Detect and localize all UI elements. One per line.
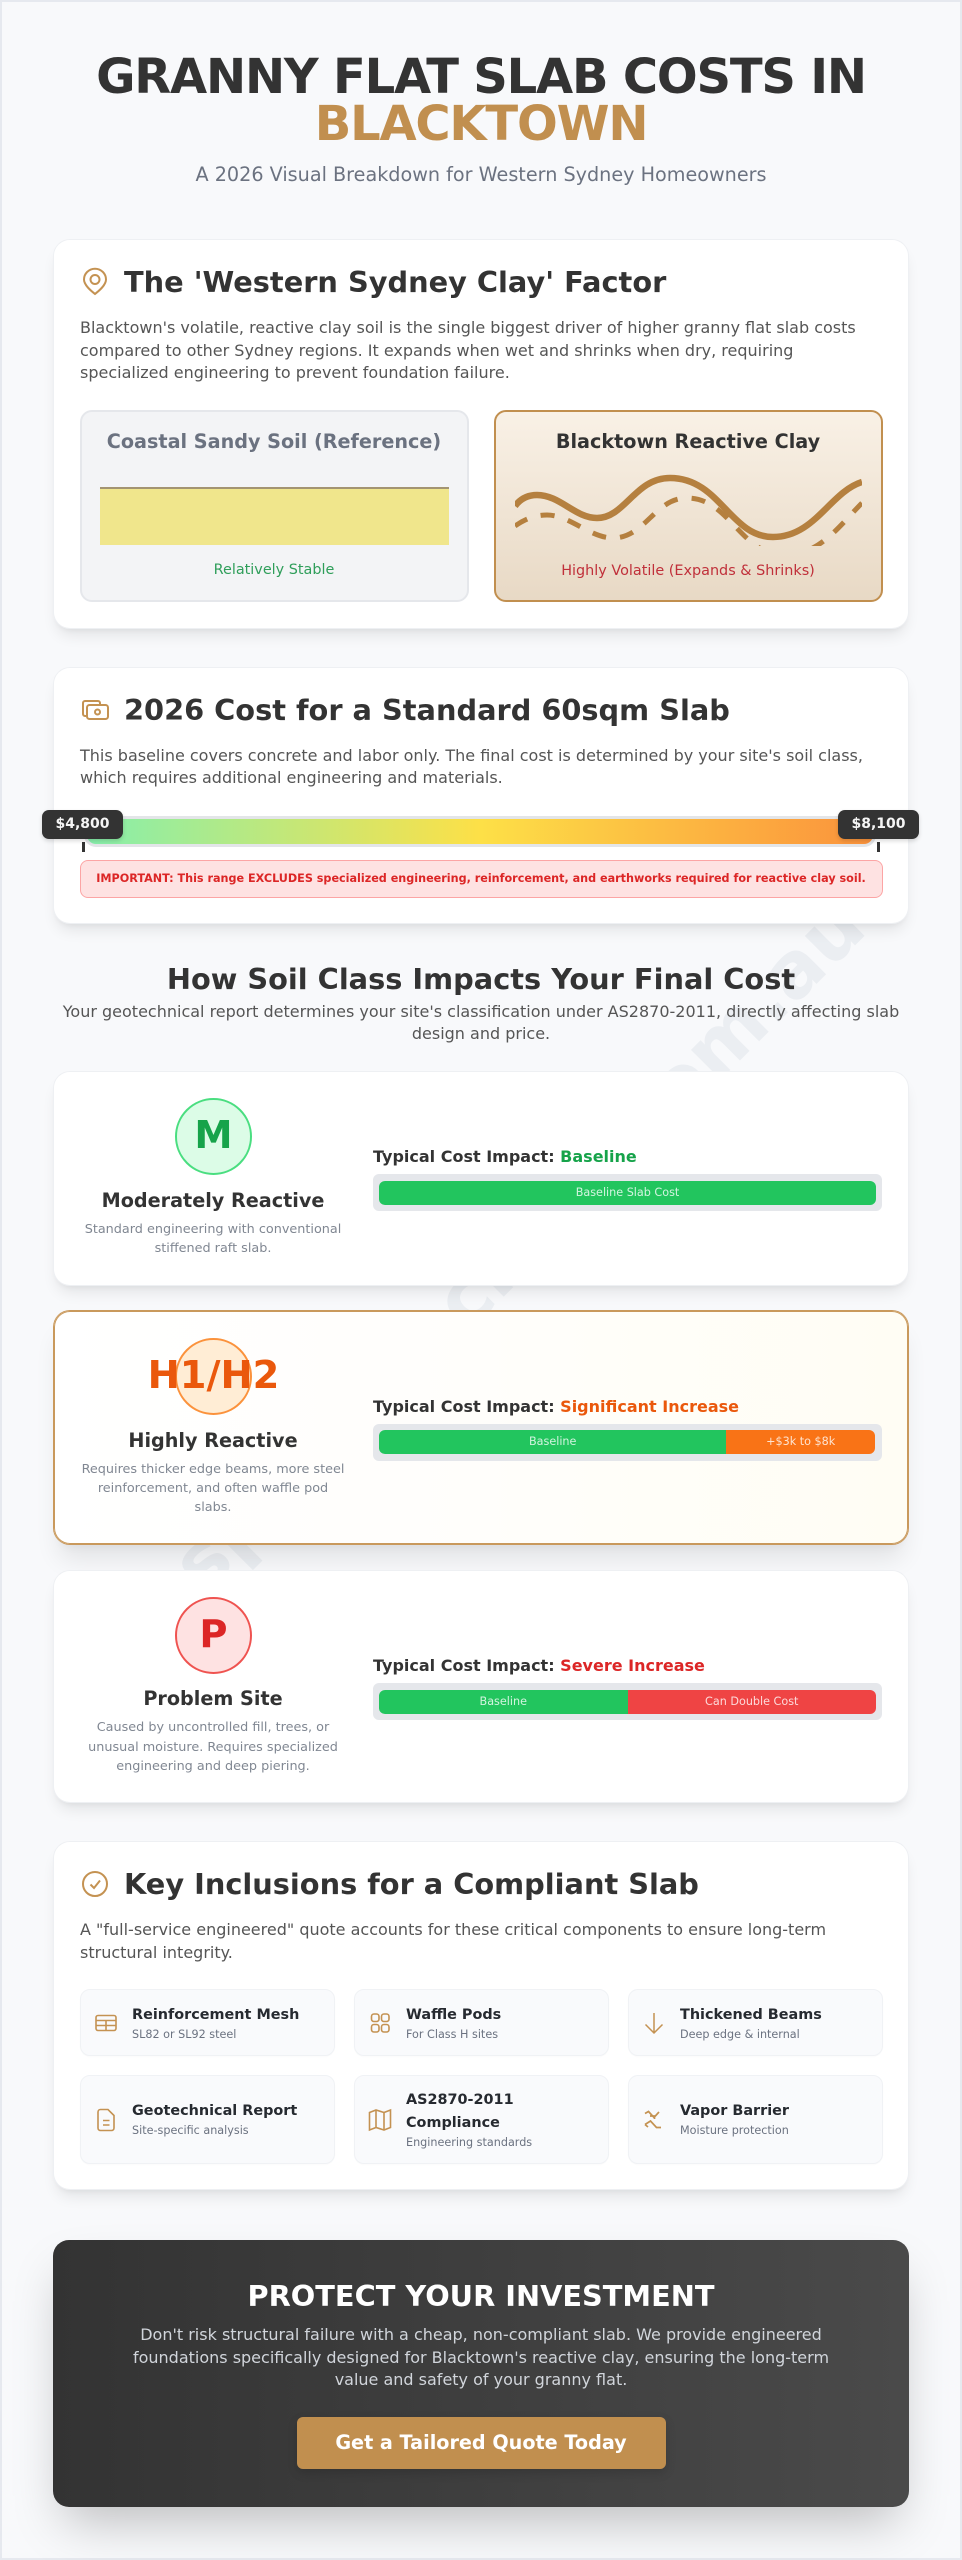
heading: Key Inclusions for a Compliant Slab — [124, 1867, 699, 1901]
cost bar — [373, 1174, 882, 1211]
icon: map pin — [83, 268, 107, 296]
cost label: Typical Cost Impact: Significant Increase — [373, 1396, 739, 1416]
cost bar: Baseline Slab Cost — [576, 1186, 679, 1198]
class description — [85, 1222, 341, 1256]
body text: value and safety of your granny flat. — [335, 2370, 627, 2389]
item: AS2870 compliance: Engineering standards — [406, 2136, 532, 2149]
stability label: Relatively Stable — [214, 562, 334, 578]
intro text: which requires additional engineering and materials. — [80, 768, 503, 787]
panel: 2026 cost — [54, 668, 908, 923]
intro text: specialized engineering to prevent foundation failure. — [80, 363, 510, 382]
tick: low — [82, 842, 84, 852]
badge: P: P — [199, 1612, 228, 1657]
icon: open map — [368, 2108, 392, 2132]
class description: Caused by uncontrolled fill, trees, or — [97, 1720, 329, 1735]
button: Get a Tailored Quote Today — [335, 2431, 627, 2454]
title — [96, 48, 866, 152]
class name: Problem Site — [143, 1687, 283, 1710]
label: high price — [838, 810, 919, 839]
item: vapor barrier — [628, 2075, 882, 2164]
item: vapor barrier: Vapor Barrier — [680, 2103, 789, 2119]
cost bar: Baseline — [529, 1435, 576, 1448]
cost label: Typical Cost Impact: Severe Increase — [373, 1656, 705, 1674]
class name: Moderately Reactive — [102, 1188, 324, 1212]
panel heading: Coastal Sandy Soil (Reference) — [107, 430, 441, 453]
badge: H1/H2: H1/H2 — [148, 1353, 279, 1398]
class description: reinforcement, and often waffle pod — [98, 1481, 328, 1496]
intro text — [80, 746, 863, 787]
button — [296, 2417, 666, 2468]
item: AS2870 compliance — [354, 2075, 608, 2164]
class name: Highly Reactive — [128, 1428, 298, 1452]
icon: mesh — [95, 2014, 117, 2032]
cost bar — [373, 1683, 882, 1720]
item: waffle pods — [354, 1989, 608, 2056]
subtitle: A 2026 Visual Breakdown for Western Sydney Homeowners — [195, 163, 767, 186]
heading: 2026 Cost for a Standard 60sqm Slab — [124, 693, 730, 727]
bar track — [84, 816, 876, 847]
label: low price: $4,800 — [55, 816, 110, 832]
icon: check circle — [82, 1871, 108, 1897]
panel: Western Sydney clay factor — [54, 240, 908, 628]
heading: PROTECT YOUR INVESTMENT — [248, 2279, 714, 2313]
item: reinforcement mesh: SL82 or SL92 steel — [132, 2028, 236, 2041]
cost bar — [373, 1424, 882, 1461]
item: vapor barrier: Moisture protection — [680, 2124, 789, 2137]
intro text: A "full-service engineered" quote accounts for these critical components to ensure long-term — [80, 1920, 826, 1939]
badge: M — [175, 1098, 252, 1175]
item: geotechnical report: Geotechnical Report — [132, 2103, 297, 2119]
panel: class M — [54, 1072, 908, 1285]
badge: P — [175, 1597, 252, 1674]
class description: Requires thicker edge beams, more steel — [82, 1462, 344, 1477]
panel: coastal sandy soil — [80, 410, 468, 602]
warning callout — [80, 860, 882, 898]
watermark: inspireconcrete.com.au — [98, 882, 883, 1667]
icon: pods — [370, 2013, 390, 2033]
item: thickened beams — [628, 1989, 882, 2056]
description: Your geotechnical report determines your site's classification under AS2870-2011, directly affecting slab — [63, 1002, 899, 1021]
call to action panel — [53, 2240, 909, 2507]
label: low price — [42, 810, 123, 839]
class description — [82, 1462, 344, 1515]
title: BLACKTOWN — [315, 96, 647, 152]
item: waffle pods: Waffle Pods — [406, 2007, 501, 2023]
badge: H1/H2 — [175, 1338, 252, 1415]
title: GRANNY FLAT SLAB COSTS IN — [96, 48, 866, 104]
description: design and price. — [412, 1024, 550, 1043]
item: thickened beams: Thickened Beams — [680, 2007, 822, 2023]
description — [62, 1002, 899, 1043]
volatility label: Highly Volatile (Expands & Shrinks) — [561, 563, 815, 579]
wave graphic: soil movement — [515, 474, 862, 546]
item: AS2870 compliance: Compliance — [406, 2114, 500, 2130]
icon: document — [97, 2108, 115, 2132]
intro text — [80, 318, 856, 382]
item: reinforcement mesh — [80, 1989, 334, 2056]
class description — [88, 1720, 338, 1774]
cost label: Typical Cost Impact: Baseline — [373, 1146, 637, 1166]
item: reinforcement mesh: Reinforcement Mesh — [132, 2007, 299, 2023]
cost bar: Baseline — [480, 1694, 527, 1708]
panel: class H1/H2 — [54, 1311, 908, 1544]
item: geotechnical report: Site-specific analysis — [132, 2124, 249, 2137]
item: thickened beams: Deep edge & internal — [680, 2028, 800, 2041]
intro text — [80, 1920, 826, 1962]
intro text: This baseline covers concrete and labor only. The final cost is determined by your site's soil class, — [80, 746, 863, 765]
icon: banknotes — [82, 700, 109, 720]
badge: M: M — [194, 1113, 233, 1158]
title: How Soil Class Impacts Your Final Cost — [167, 962, 795, 996]
body text: Don't risk structural failure with a cheap, non-compliant slab. We provide engineered — [140, 2325, 822, 2344]
cost range bar — [40, 810, 920, 852]
item: geotechnical report — [80, 2075, 334, 2164]
heading: The 'Western Sydney Clay' Factor — [124, 264, 666, 298]
class description: slabs. — [195, 1500, 231, 1515]
intro text: Blacktown's volatile, reactive clay soil is the single biggest driver of higher granny flat slab costs — [80, 318, 856, 337]
item: waffle pods: For Class H sites — [406, 2028, 498, 2041]
intro text: compared to other Sydney regions. It expands when wet and shrinks when dry, requiring — [80, 341, 793, 360]
cost bar: Can Double Cost — [705, 1694, 798, 1708]
intro text: structural integrity. — [80, 1943, 233, 1962]
class description: Standard engineering with conventional — [85, 1222, 341, 1237]
header — [96, 48, 866, 186]
sand layer graphic — [100, 486, 448, 545]
panel: Blacktown reactive clay — [494, 410, 882, 602]
tick: high — [877, 842, 880, 852]
section heading — [62, 962, 899, 1043]
class description: stiffened raft slab. — [155, 1241, 271, 1256]
body text — [133, 2325, 829, 2389]
body text: foundations specifically designed for Blacktown's reactive clay, ensuring the long-term — [133, 2348, 829, 2367]
panel heading: Blacktown Reactive Clay — [556, 430, 820, 453]
class description: unusual moisture. Requires specialized — [88, 1740, 338, 1755]
warning callout: IMPORTANT: This range EXCLUDES specialized engineering, reinforcement, and earthworks required for reactive clay soil. — [96, 872, 866, 885]
icon: moisture arrows — [644, 2110, 661, 2128]
panel: class P — [54, 1571, 908, 1802]
panel: key inclusions — [54, 1842, 908, 2189]
class description: engineering and deep piering. — [116, 1759, 310, 1774]
label: high price: $8,100 — [851, 816, 906, 832]
cost bar: +$3k to $8k — [766, 1435, 835, 1448]
icon: down arrow — [645, 2013, 663, 2034]
item: AS2870 compliance: AS2870-2011 — [406, 2092, 514, 2108]
